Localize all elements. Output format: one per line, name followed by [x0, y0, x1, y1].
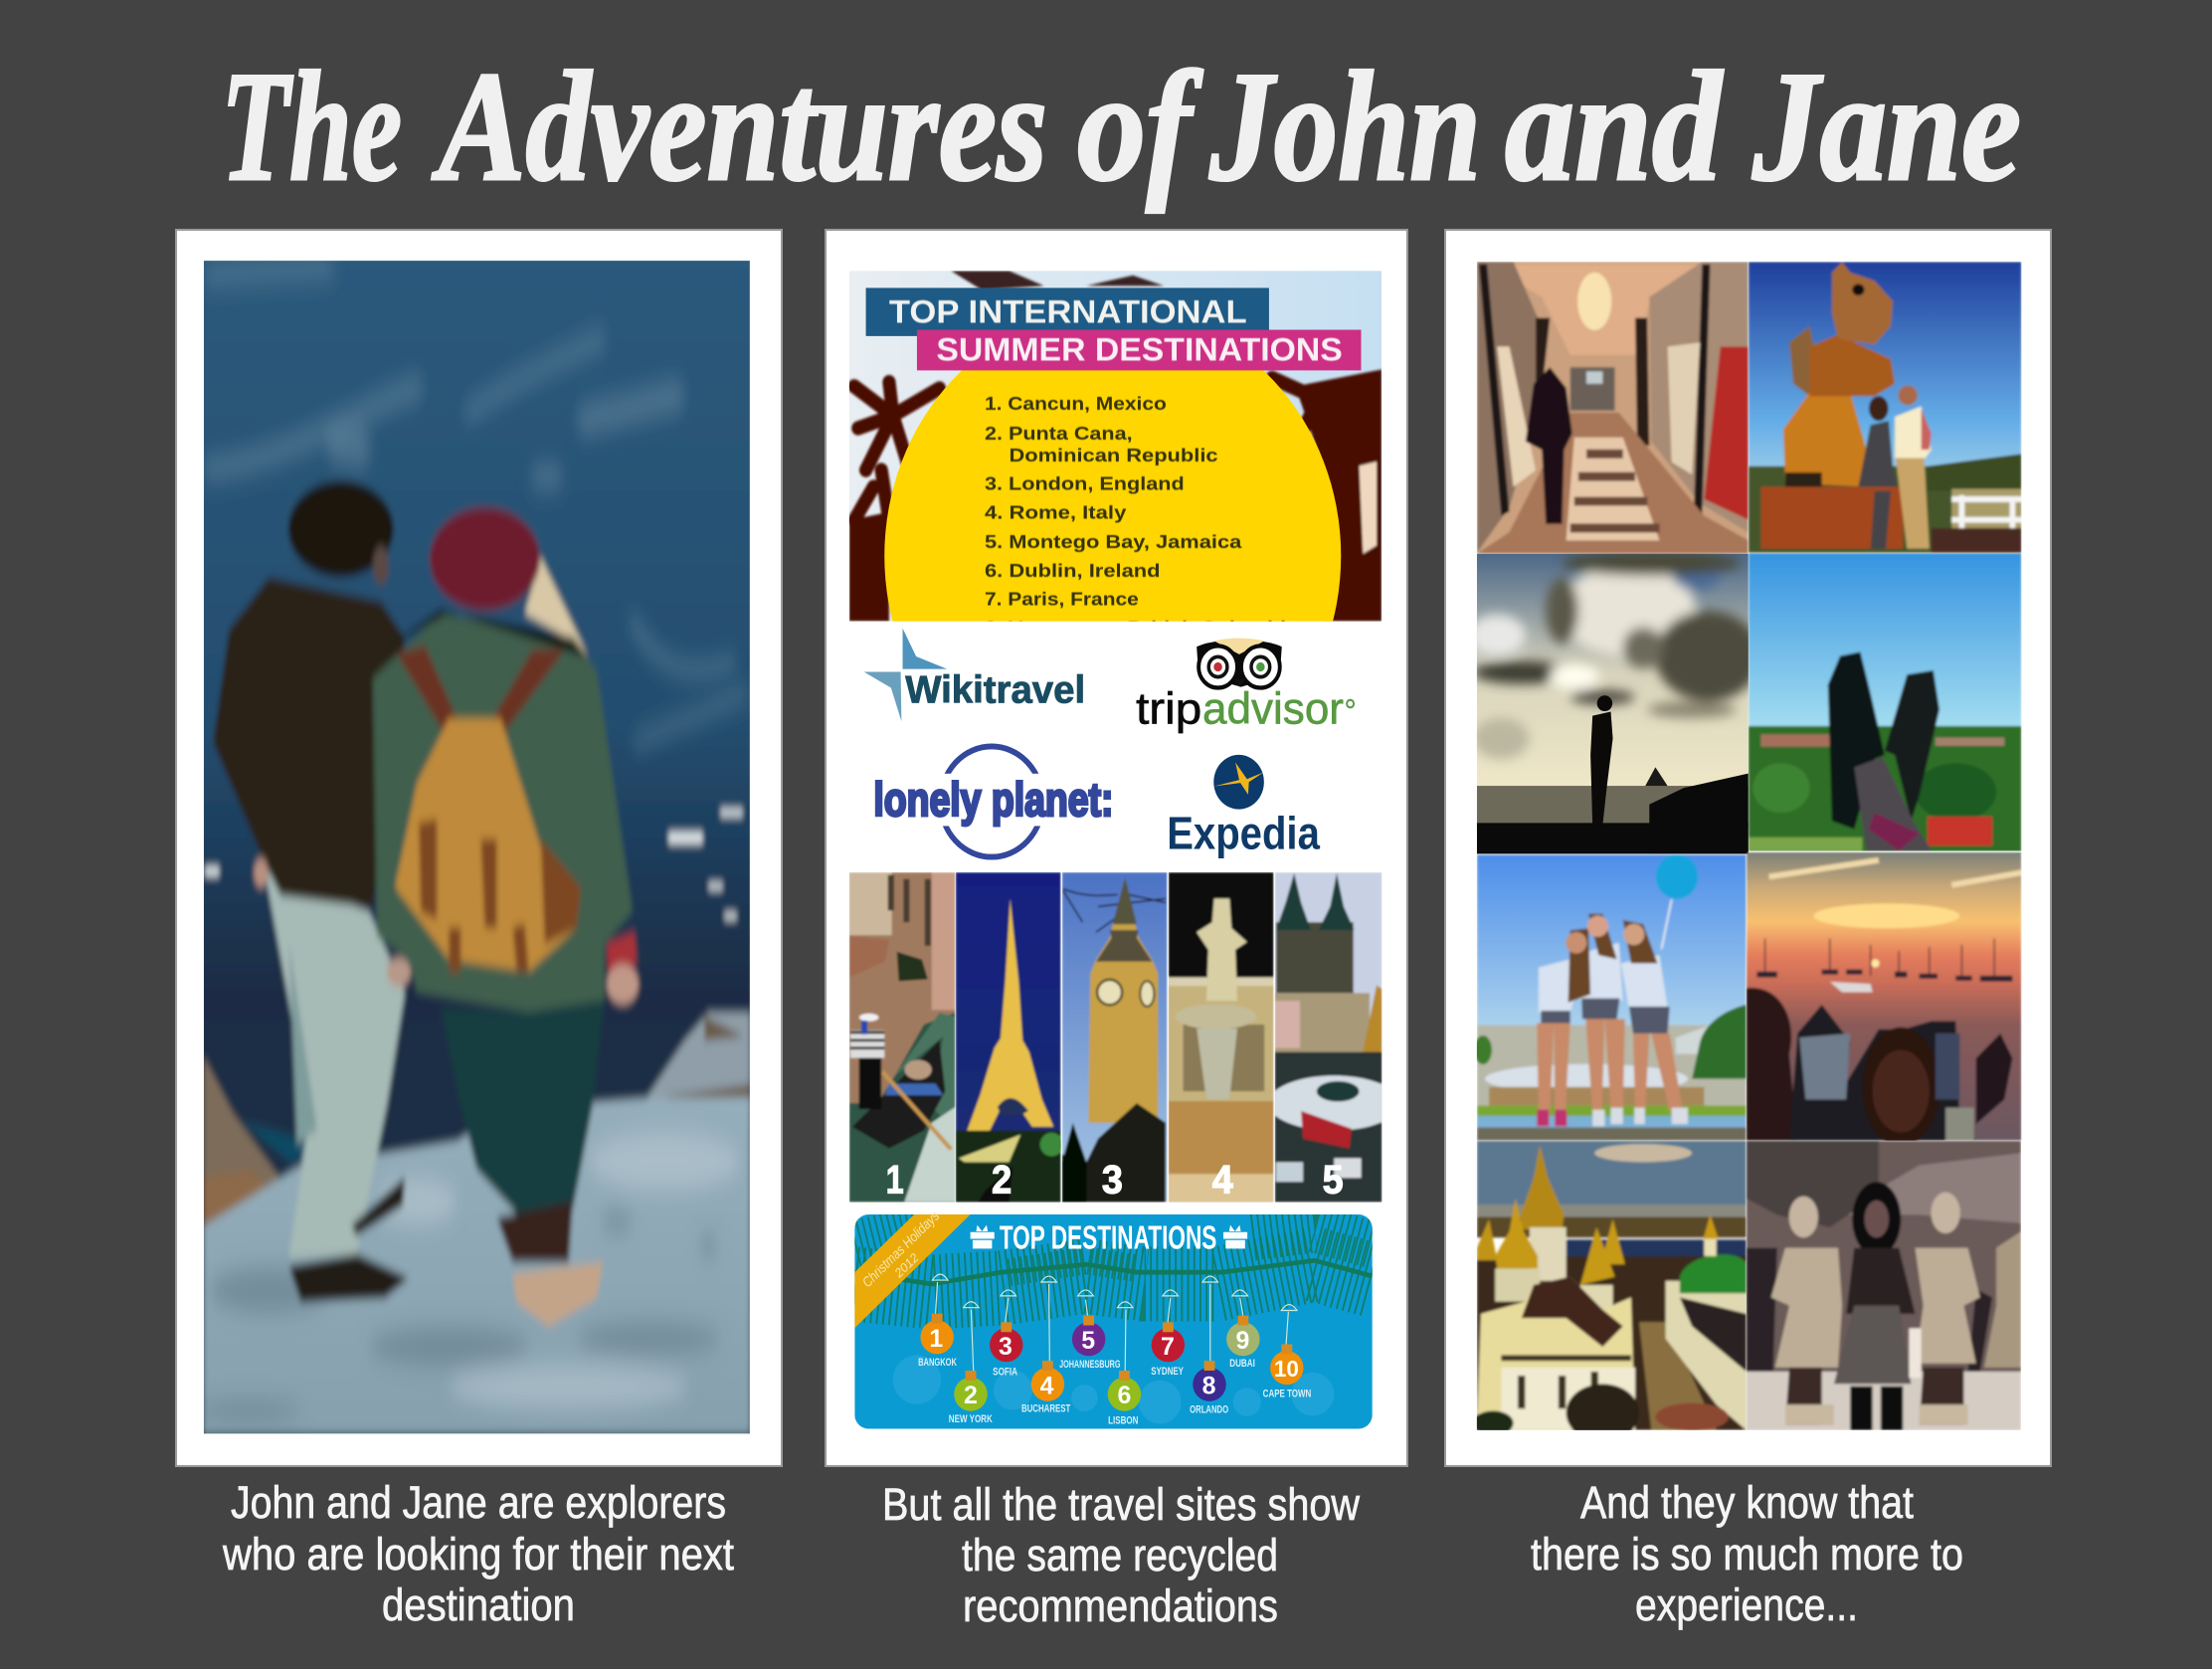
- image: top destinations banner: 2: [964, 1382, 978, 1409]
- image: top destinations banner: 1: [929, 1325, 943, 1353]
- caption: much more to experience: And they know that: [1580, 1477, 1914, 1528]
- image: top destinations banner: 5: [1081, 1327, 1095, 1355]
- title: Adventures: [432, 40, 1047, 214]
- strip 2: Eiffel Tower: [956, 872, 1063, 1203]
- strip numbers: 1: [886, 1158, 904, 1202]
- image: top destinations banner: BUCHAREST: [1021, 1402, 1071, 1415]
- logo: Wikitravel: [864, 629, 1085, 721]
- image: top international summer destinations: 8. Vancouver, British Columbia: [985, 618, 1299, 639]
- photo: squirrel statue: [1749, 262, 2021, 553]
- caption: explorers: John and Jane are explorers: [231, 1477, 726, 1528]
- image: top destinations banner: 9: [1236, 1327, 1249, 1355]
- image: top international summer destinations: 6. Dublin, Ireland: [985, 560, 1161, 581]
- title: The: [221, 40, 402, 214]
- caption: recycled recommendations: But all the travel sites show: [882, 1479, 1360, 1530]
- image: top destinations banner: 7: [1161, 1333, 1175, 1361]
- title: [221, 40, 2021, 214]
- strip 1: Venice: [849, 872, 955, 1203]
- image: top destinations banner: 10: [1274, 1356, 1299, 1382]
- image: top destinations banner: Christmas Holidays: [859, 1207, 942, 1290]
- photo: sunset crowd: [1747, 852, 2021, 1147]
- strip 3: Big Ben: [1062, 872, 1168, 1203]
- photo: terracotta warriors: [1747, 1141, 2021, 1430]
- image: top international summer destinations: TOP INTERNATIONAL: [889, 293, 1247, 330]
- logo: tripadvisor: trip: [1136, 684, 1201, 734]
- caption: much more to experience: [1531, 1477, 1963, 1630]
- logos group: [864, 629, 1354, 859]
- photo: fashion hallway: [1477, 262, 1749, 554]
- image: top destinations banner: LISBON: [1108, 1414, 1138, 1426]
- strip numbers: 4: [1212, 1158, 1233, 1202]
- image: top destinations banner: NEW YORK: [949, 1413, 993, 1425]
- strip 5: Prague: [1275, 872, 1382, 1203]
- caption: much more to experience: experience...: [1635, 1579, 1858, 1630]
- logo: tripadvisor: [1136, 639, 1354, 734]
- image: top destinations banner: SOFIA: [993, 1367, 1017, 1379]
- caption: much more to experience: there is so much more to: [1531, 1529, 1963, 1579]
- image: top destinations banner: DUBAI: [1229, 1358, 1255, 1370]
- logo: tripadvisor: advisor: [1202, 684, 1344, 734]
- panel: traveller photo collage: [1445, 230, 2051, 1466]
- caption: recycled recommendations: recommendations: [963, 1580, 1278, 1631]
- image: top destinations banner: 6: [1117, 1382, 1131, 1409]
- image: top destinations banner: 8: [1202, 1372, 1216, 1399]
- strip 4: fountain statue: [1169, 872, 1274, 1203]
- title: and: [1505, 40, 1724, 214]
- caption: recycled recommendations: [882, 1479, 1360, 1631]
- strip numbers: 3: [1102, 1158, 1123, 1202]
- logo: lonely planet: lonely planet:: [873, 773, 1114, 826]
- image: top destinations banner: TOP DESTINATIONS: [1000, 1218, 1216, 1255]
- image: top destinations banner: 2012: [891, 1251, 921, 1281]
- photo: Kiev monastery: [1473, 1141, 1747, 1441]
- image: top international summer destinations: 7. Paris, France: [985, 589, 1139, 610]
- image: top destinations banner: 4: [1040, 1372, 1054, 1399]
- image: top destinations banner: JOHANNESBURG: [1059, 1359, 1121, 1371]
- photo: girls with balloon: [1474, 854, 1747, 1141]
- logo: Expedia: [1167, 755, 1321, 859]
- strip numbers: 5: [1323, 1158, 1344, 1202]
- photo: couple on a cliff: [193, 243, 761, 1451]
- image: top international summer destinations: SUMMER DESTINATIONS: [936, 331, 1343, 368]
- image: top international summer destinations: Dominican Republic: [1010, 445, 1218, 465]
- strip numbers: 2: [992, 1158, 1012, 1202]
- panel: recycled recommendations: [826, 230, 1407, 1466]
- photo: shoes over trees: [1749, 553, 2021, 851]
- title: Jane: [1751, 40, 2021, 214]
- logo: lonely planet: [873, 746, 1114, 857]
- title: John: [1208, 40, 1481, 214]
- image: top destinations banner: [854, 1207, 1373, 1428]
- image: top international summer destinations: 1. Cancun, Mexico: [985, 393, 1167, 414]
- strip numbers: [886, 1158, 1344, 1202]
- caption: explorers: [222, 1477, 734, 1630]
- title: of: [1077, 40, 1203, 214]
- image: five landmark strips: [849, 872, 1399, 1203]
- image: top destinations banner: BANGKOK: [918, 1357, 957, 1369]
- logo: Expedia: Expedia: [1167, 809, 1321, 859]
- image: top destinations banner: 3: [999, 1333, 1013, 1361]
- image: top destinations banner: ORLANDO: [1190, 1403, 1228, 1415]
- photo: silhouette under clouds: [1469, 551, 1760, 853]
- image: top destinations banner: CAPE TOWN: [1263, 1388, 1311, 1399]
- caption: recycled recommendations: the same recycled: [962, 1530, 1278, 1580]
- caption: explorers: destination: [382, 1579, 575, 1630]
- logo: Wikitravel: Wikitravel: [905, 667, 1085, 711]
- image: top international summer destinations: 2. Punta Cana,: [985, 423, 1133, 444]
- caption: explorers: who are looking for their next: [222, 1529, 734, 1579]
- image: top international summer destinations: [849, 271, 1382, 622]
- image: top international summer destinations: 5. Montego Bay, Jamaica: [985, 531, 1243, 552]
- image: top international summer destinations: 4. Rome, Italy: [985, 502, 1126, 523]
- panel: explorers photo: [176, 230, 782, 1466]
- image: top international summer destinations: 3. London, England: [985, 473, 1185, 494]
- image: top destinations banner: SYDNEY: [1151, 1366, 1184, 1378]
